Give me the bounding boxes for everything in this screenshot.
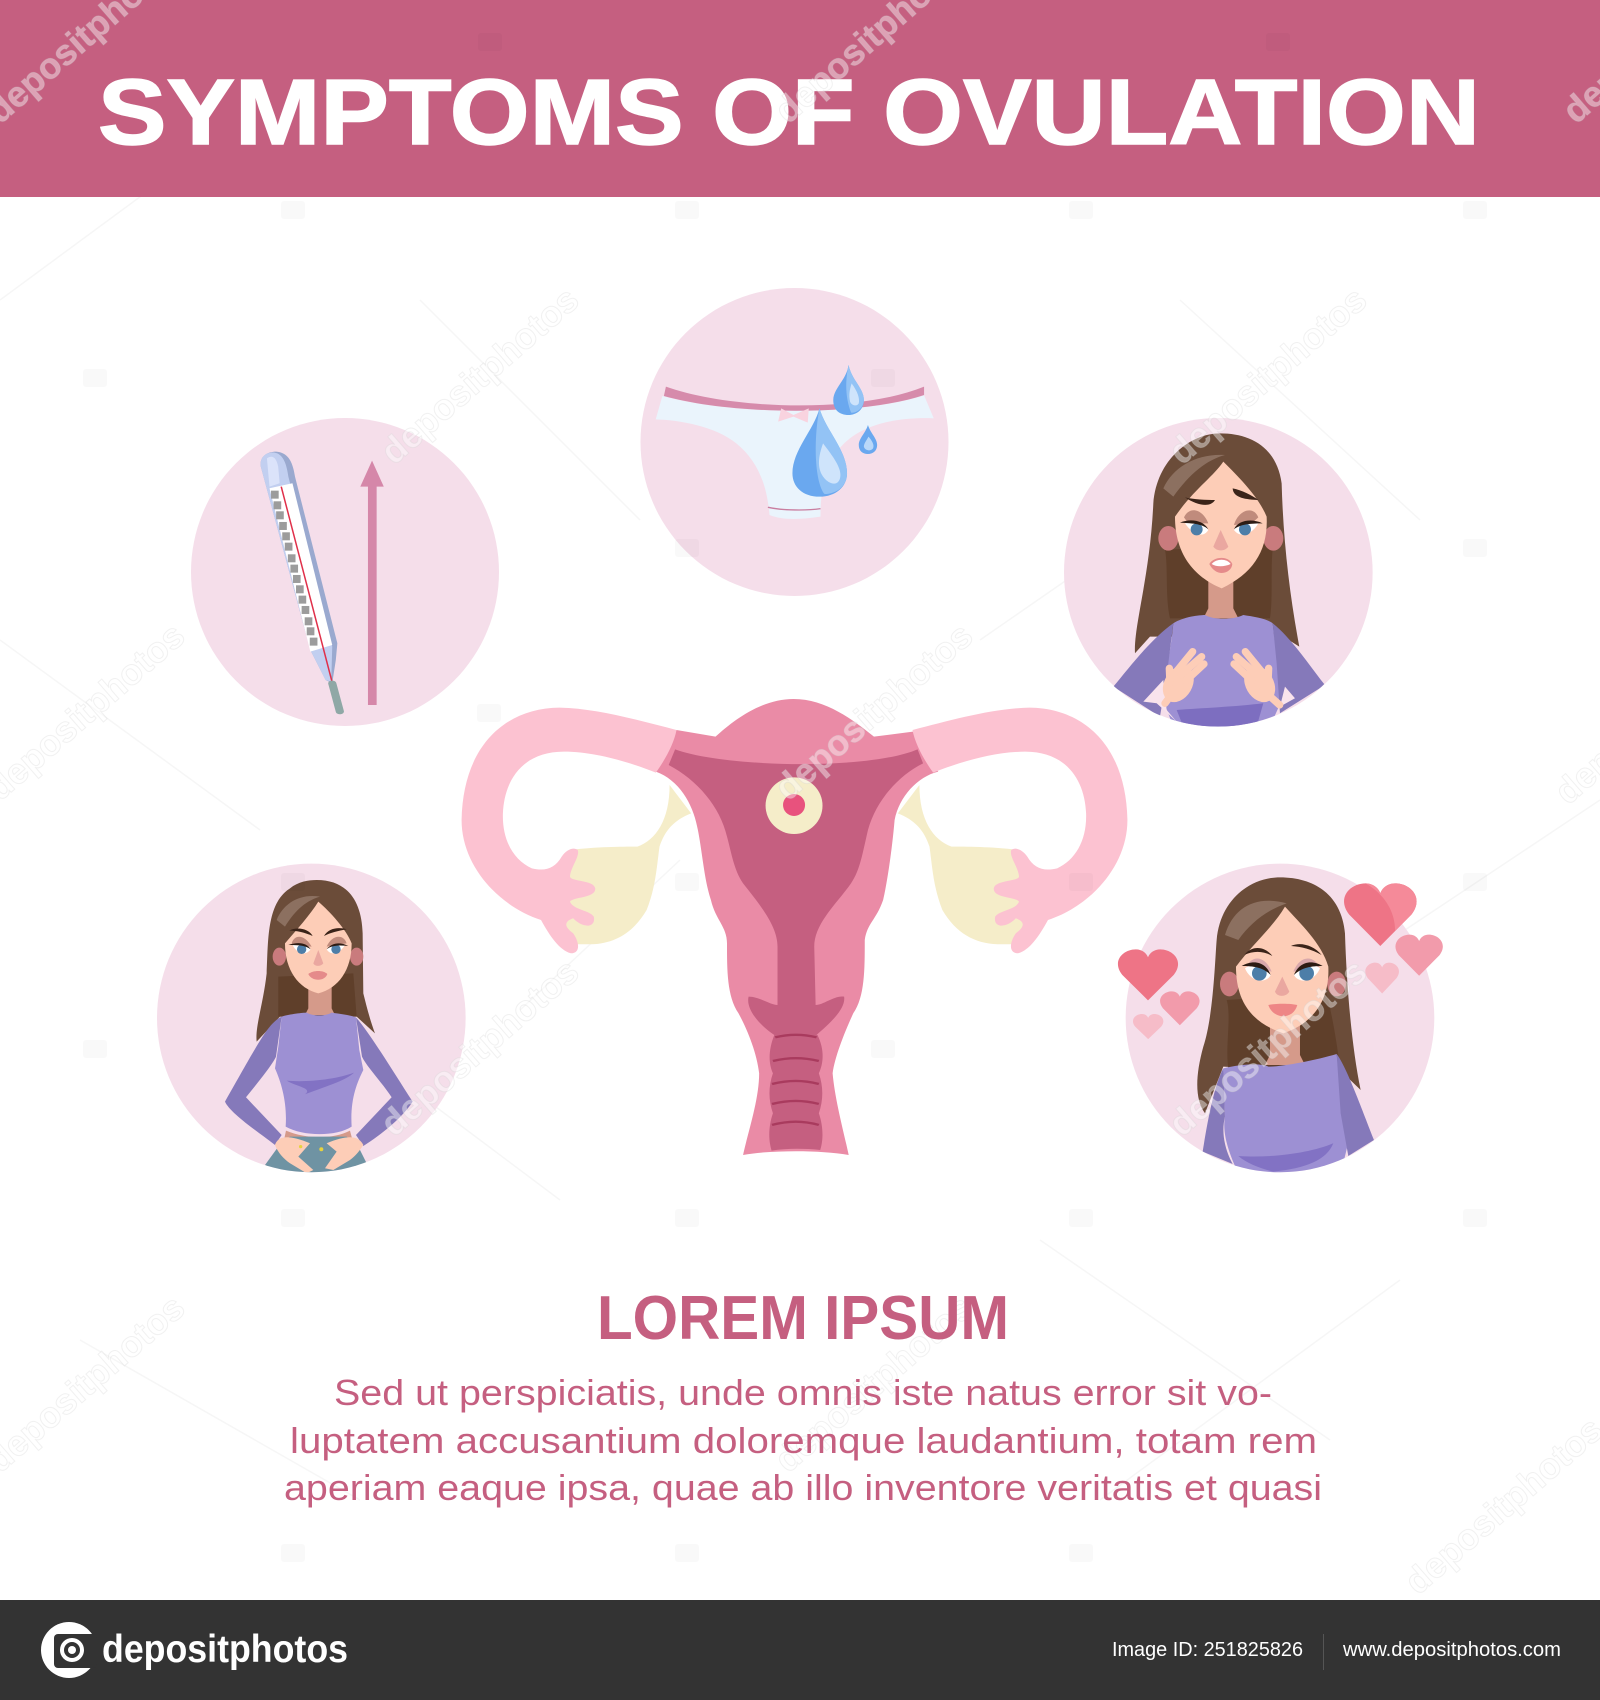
header banner	[0, 0, 1600, 197]
title: SYMPTOMS OF OVULATION	[98, 60, 1480, 164]
figure: worried woman	[1113, 433, 1325, 727]
ovary: right	[898, 785, 1025, 944]
icon: underwear	[656, 387, 934, 519]
icon: thermometer	[261, 452, 340, 712]
logo wordmark: depositphotos	[102, 1628, 348, 1671]
heading: lorem ipsum: LOREM IPSUM	[597, 1284, 1009, 1353]
panel: woman with abdominal pain	[157, 864, 466, 1177]
arrow: temperature rising	[360, 461, 384, 705]
embryo	[766, 777, 823, 834]
icon: hearts	[1118, 883, 1443, 1039]
watermarks: depositphotos	[1160, 950, 1374, 1144]
fallopian tube: right	[913, 708, 1127, 953]
icon: camera logo	[41, 1622, 97, 1678]
body text: Sed ut perspiciatis, unde omnis iste natus error sit vo-	[334, 1372, 1272, 1413]
uterine cavity	[669, 749, 923, 1035]
watermarks: depositphotos	[1160, 278, 1374, 472]
diagram: uterus and ovaries	[462, 699, 1127, 1155]
watermarks: depositphotos	[766, 614, 980, 808]
fallopian tube: left	[462, 708, 676, 953]
body text	[284, 1372, 1322, 1508]
panel: woman touching sensitive breasts	[1064, 418, 1373, 727]
ovary: left	[564, 785, 691, 944]
image id: Image ID: 251825826	[1112, 1639, 1303, 1661]
panel: woman with increased libido	[1118, 864, 1443, 1177]
uterine wall	[656, 699, 938, 1155]
body text: luptatem accusantium doloremque laudantium, totam rem	[290, 1420, 1317, 1461]
hand: right	[1234, 652, 1281, 708]
panel: thermometer and rising arrow	[191, 418, 499, 726]
watermarks: depositphotos	[766, 1286, 980, 1480]
panel: discharge on underwear	[640, 288, 948, 596]
figure: woman holding stomach	[225, 880, 413, 1177]
body text: aperiam eaque ipsa, quae ab illo inventore veritatis et quasi	[284, 1467, 1322, 1508]
watermarks: depositphotos	[372, 950, 586, 1144]
hand: left	[1157, 652, 1204, 708]
watermarks: depositphotos	[372, 278, 586, 472]
cervical canal	[769, 1035, 823, 1151]
website: www.depositphotos.com	[1342, 1639, 1561, 1661]
figure: woman in love	[1197, 877, 1374, 1177]
icon: water drops	[792, 365, 877, 497]
footer bar	[0, 1600, 1600, 1700]
